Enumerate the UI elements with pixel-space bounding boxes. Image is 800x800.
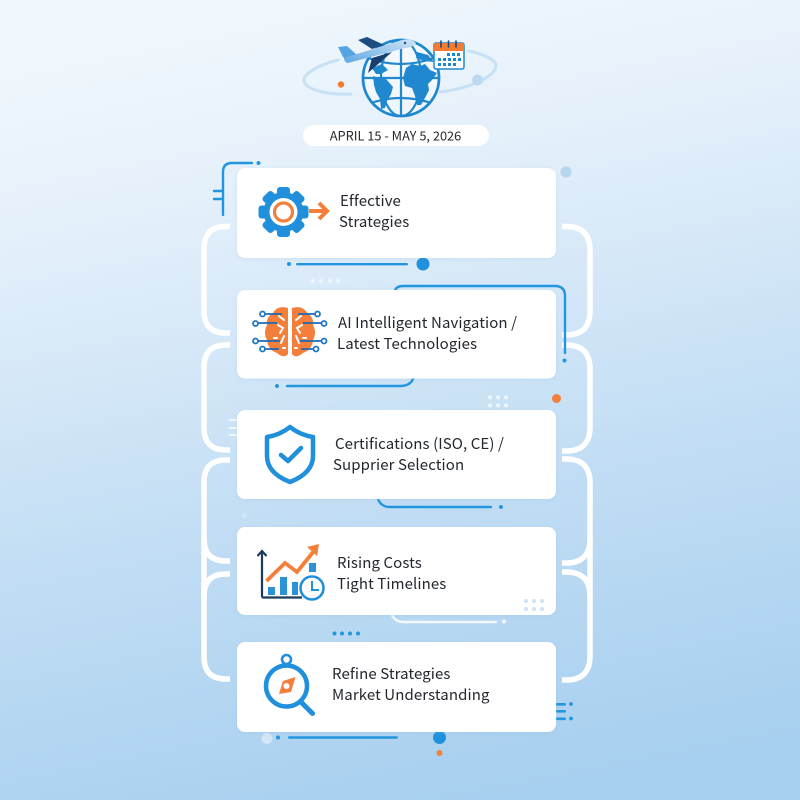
decoration: right ticks at card 5 [556,702,573,720]
card text: Refine Strategies [332,663,451,684]
date pill [303,125,489,146]
card text: Rising Costs [337,552,422,573]
panel: ai intelligent navigation [237,290,556,378]
card text: AI Intelligent Navigation / [338,312,517,333]
decoration: line under card 2 [275,379,413,388]
right white connectors [562,226,590,680]
decoration: white line under card 4 [392,615,506,623]
decoration: top-left blue circuit [214,161,260,215]
card text: Certifications (ISO, CE) / [335,433,504,454]
card text: Effective [340,190,401,211]
icon: compass magnifier [266,655,312,714]
panel: effective strategies [237,168,556,258]
icon: globe [363,40,439,116]
icon: shield with check [267,427,313,482]
icon: calendar [434,41,464,69]
icon: gear with arrow [258,187,327,237]
decoration: white dots [311,279,340,283]
panel: refine strategies [237,642,556,732]
orbit dots [338,74,483,88]
card text: Tight Timelines [337,573,446,594]
card text: Latest Technologies [337,333,477,354]
panel: rising costs [237,527,556,615]
decoration: blue circuit around card 2 [395,286,566,362]
icon: airplane [338,37,416,73]
left white connectors [204,226,230,679]
decoration: line under card 1 [287,258,430,270]
decoration: white tick marks at card 3 [229,420,237,435]
decoration: top-right circle [560,166,572,178]
icon: rising chart with clock [258,544,324,600]
panel: certifications [237,410,556,499]
decoration: faint dot [242,513,247,518]
card text: Market Understanding [332,684,490,705]
decoration: dot grid and orange dot [488,394,561,408]
decoration: blue dots above card 5 [332,632,360,636]
date pill: APRIL 15 - MAY 5, 2026 [330,126,461,144]
icon: ai brain [253,307,326,356]
card text: Strategies [339,211,409,232]
decoration: dot grid [524,599,544,611]
header orbit ring [304,51,496,94]
card text: Supprier Selection [333,454,464,475]
decoration: line under card 3 [378,499,503,509]
decoration: line under card 5 [262,731,446,756]
